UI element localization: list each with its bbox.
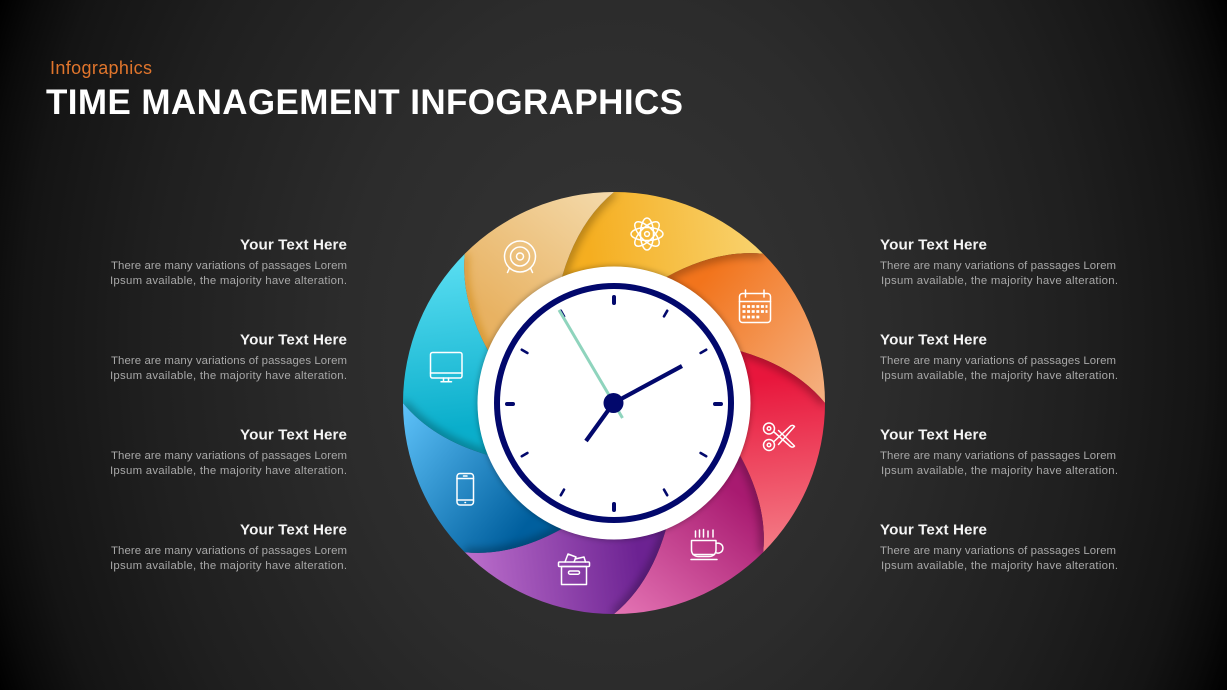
subtitle: Infographics xyxy=(50,58,152,78)
icon: coffee cup xyxy=(691,530,723,560)
text block: left 1: There are many variations of passages Lorem xyxy=(111,260,347,272)
petal: purple xyxy=(465,529,666,614)
text block: right 1 xyxy=(880,236,1118,287)
text block: left 2: Ipsum available, the majority have alteration. xyxy=(110,370,347,382)
hour hand xyxy=(586,403,614,441)
clock rim xyxy=(497,286,731,520)
text block: right 4: Your Text Here xyxy=(880,522,987,538)
text block: right 3: Ipsum available, the majority have alteration. xyxy=(881,465,1118,477)
text block: right 4: Ipsum available, the majority have alteration. xyxy=(881,560,1118,572)
text block: left 2 xyxy=(110,332,347,382)
petal: blue xyxy=(403,403,562,553)
second hand xyxy=(559,310,622,418)
text block: right 4: There are many variations of passages Lorem xyxy=(880,545,1116,557)
text block: right 2: There are many variations of passages Lorem xyxy=(880,355,1116,367)
text block: right 1: Ipsum available, the majority have alteration. xyxy=(881,275,1118,287)
petal: cyan xyxy=(403,254,488,455)
text block: left 1 xyxy=(110,236,347,287)
icon: calendar xyxy=(740,290,770,322)
clock hub xyxy=(604,393,624,413)
hour ticks xyxy=(507,297,721,510)
text block: left 3: There are many variations of passages Lorem xyxy=(111,450,347,462)
clock xyxy=(477,266,751,540)
text block: right 3: There are many variations of passages Lorem xyxy=(880,450,1116,462)
text block: left 4: Your Text Here xyxy=(240,522,347,538)
text block: left 3: Your Text Here xyxy=(240,426,347,444)
clock face xyxy=(478,266,750,540)
text block: right 3: Your Text Here xyxy=(880,426,987,444)
pinwheel chart xyxy=(403,192,825,614)
minute hand xyxy=(614,366,682,403)
text block: right 2: Ipsum available, the majority have alteration. xyxy=(881,370,1118,382)
petal: beige xyxy=(464,192,614,350)
text block: left 4 xyxy=(110,522,347,572)
icon: atom xyxy=(631,218,663,250)
text block: left 3 xyxy=(110,426,347,477)
text block: left 4: Ipsum available, the majority have alteration. xyxy=(110,560,347,572)
icon: box xyxy=(558,554,590,584)
text block: right 1: Your Text Here xyxy=(880,236,987,254)
text block: left 1: Your Text Here xyxy=(240,236,347,254)
icon: monitor xyxy=(430,352,462,382)
petal: yellow xyxy=(562,192,763,277)
title: TIME MANAGEMENT INFOGRAPHICS xyxy=(46,83,683,122)
text block: right 2 xyxy=(880,332,1118,382)
petal: orange xyxy=(666,253,825,403)
text block: left 4: There are many variations of passages Lorem xyxy=(111,545,347,557)
text block: left 3: Ipsum available, the majority have alteration. xyxy=(110,465,347,477)
text block: right 1: There are many variations of passages Lorem xyxy=(880,260,1116,272)
petal: magenta xyxy=(614,456,764,614)
text block: left 2: Your Text Here xyxy=(240,332,347,348)
text block: left 2: There are many variations of passages Lorem xyxy=(111,355,347,367)
text block: left 1: Ipsum available, the majority have alteration. xyxy=(110,275,347,287)
icon: scissors xyxy=(764,423,794,450)
icon: target xyxy=(504,241,536,272)
text block: right 2: Your Text Here xyxy=(880,332,987,348)
text block: right 4 xyxy=(880,522,1118,572)
petal: red xyxy=(740,351,825,552)
clock bezel shadow xyxy=(477,266,751,540)
icon: phone xyxy=(457,474,474,505)
text block: right 3 xyxy=(880,426,1118,477)
